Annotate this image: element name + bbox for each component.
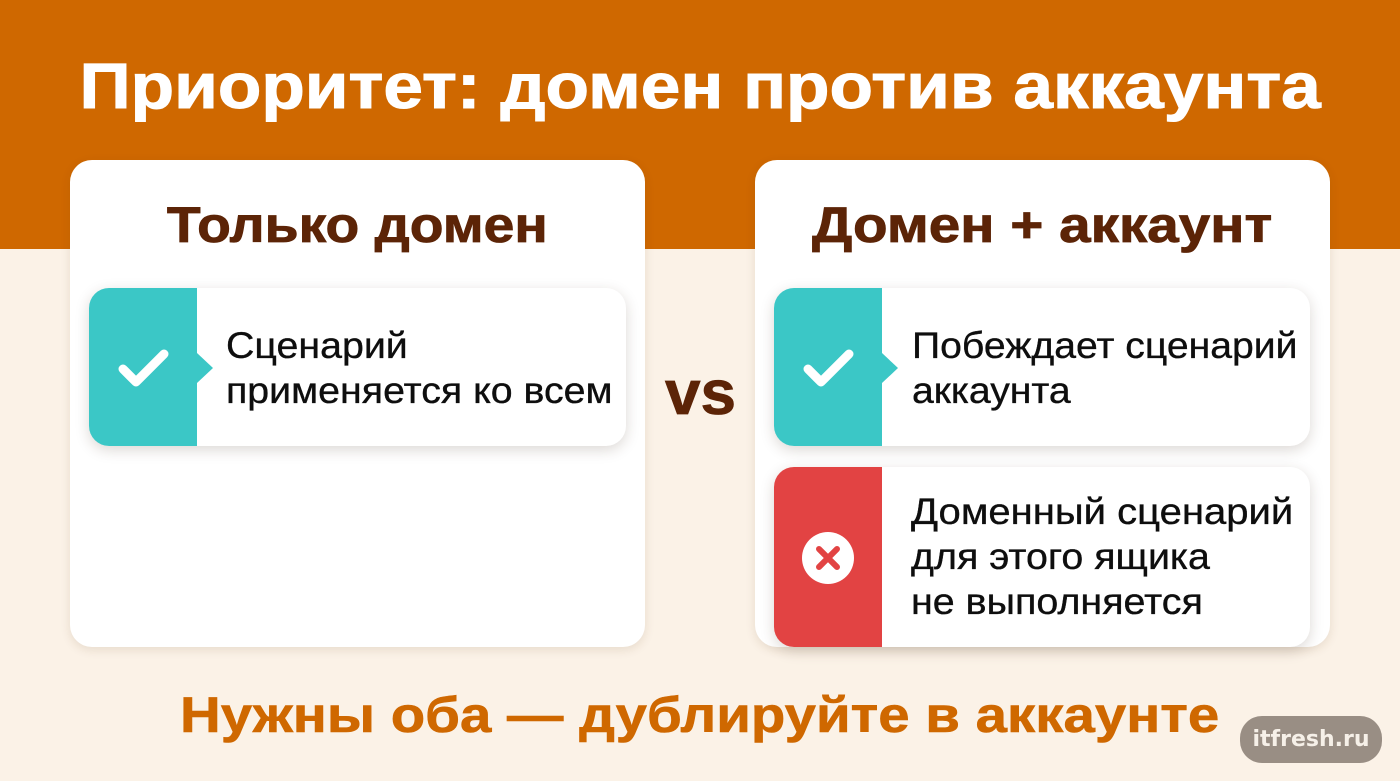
card text: Побеждает сценарий (912, 325, 1298, 366)
vs label: vs (664, 359, 736, 428)
icon: cross tab (774, 467, 882, 647)
card text (911, 491, 1293, 622)
panel: domain plus account (755, 160, 1330, 647)
card text: аккаунта (912, 370, 1071, 411)
card: script applies to all (89, 288, 626, 446)
watermark badge (1240, 716, 1382, 763)
panel: only domain (70, 160, 645, 647)
card: domain script does not run (774, 467, 1310, 647)
heading: domain plus account: Домен + аккаунт (812, 197, 1273, 253)
title: Приоритет: домен против аккаунта (79, 50, 1321, 122)
card text: для этого ящика (911, 536, 1210, 577)
card text: применяется ко всем (226, 370, 613, 411)
icon: check tab (89, 288, 197, 446)
card text: не выполняется (911, 581, 1203, 622)
heading: only domain: Только домен (167, 197, 548, 253)
card text: Доменный сценарий (911, 491, 1293, 532)
watermark badge: itfresh.ru (1252, 727, 1370, 752)
card text: Сценарий (226, 325, 408, 366)
header band (0, 0, 1400, 249)
card: account script wins (774, 288, 1310, 446)
footer message: Нужны оба — дублируйте в аккаунте (180, 687, 1220, 743)
icon: check tab (774, 288, 882, 446)
card text (226, 325, 613, 411)
card text (912, 325, 1298, 411)
